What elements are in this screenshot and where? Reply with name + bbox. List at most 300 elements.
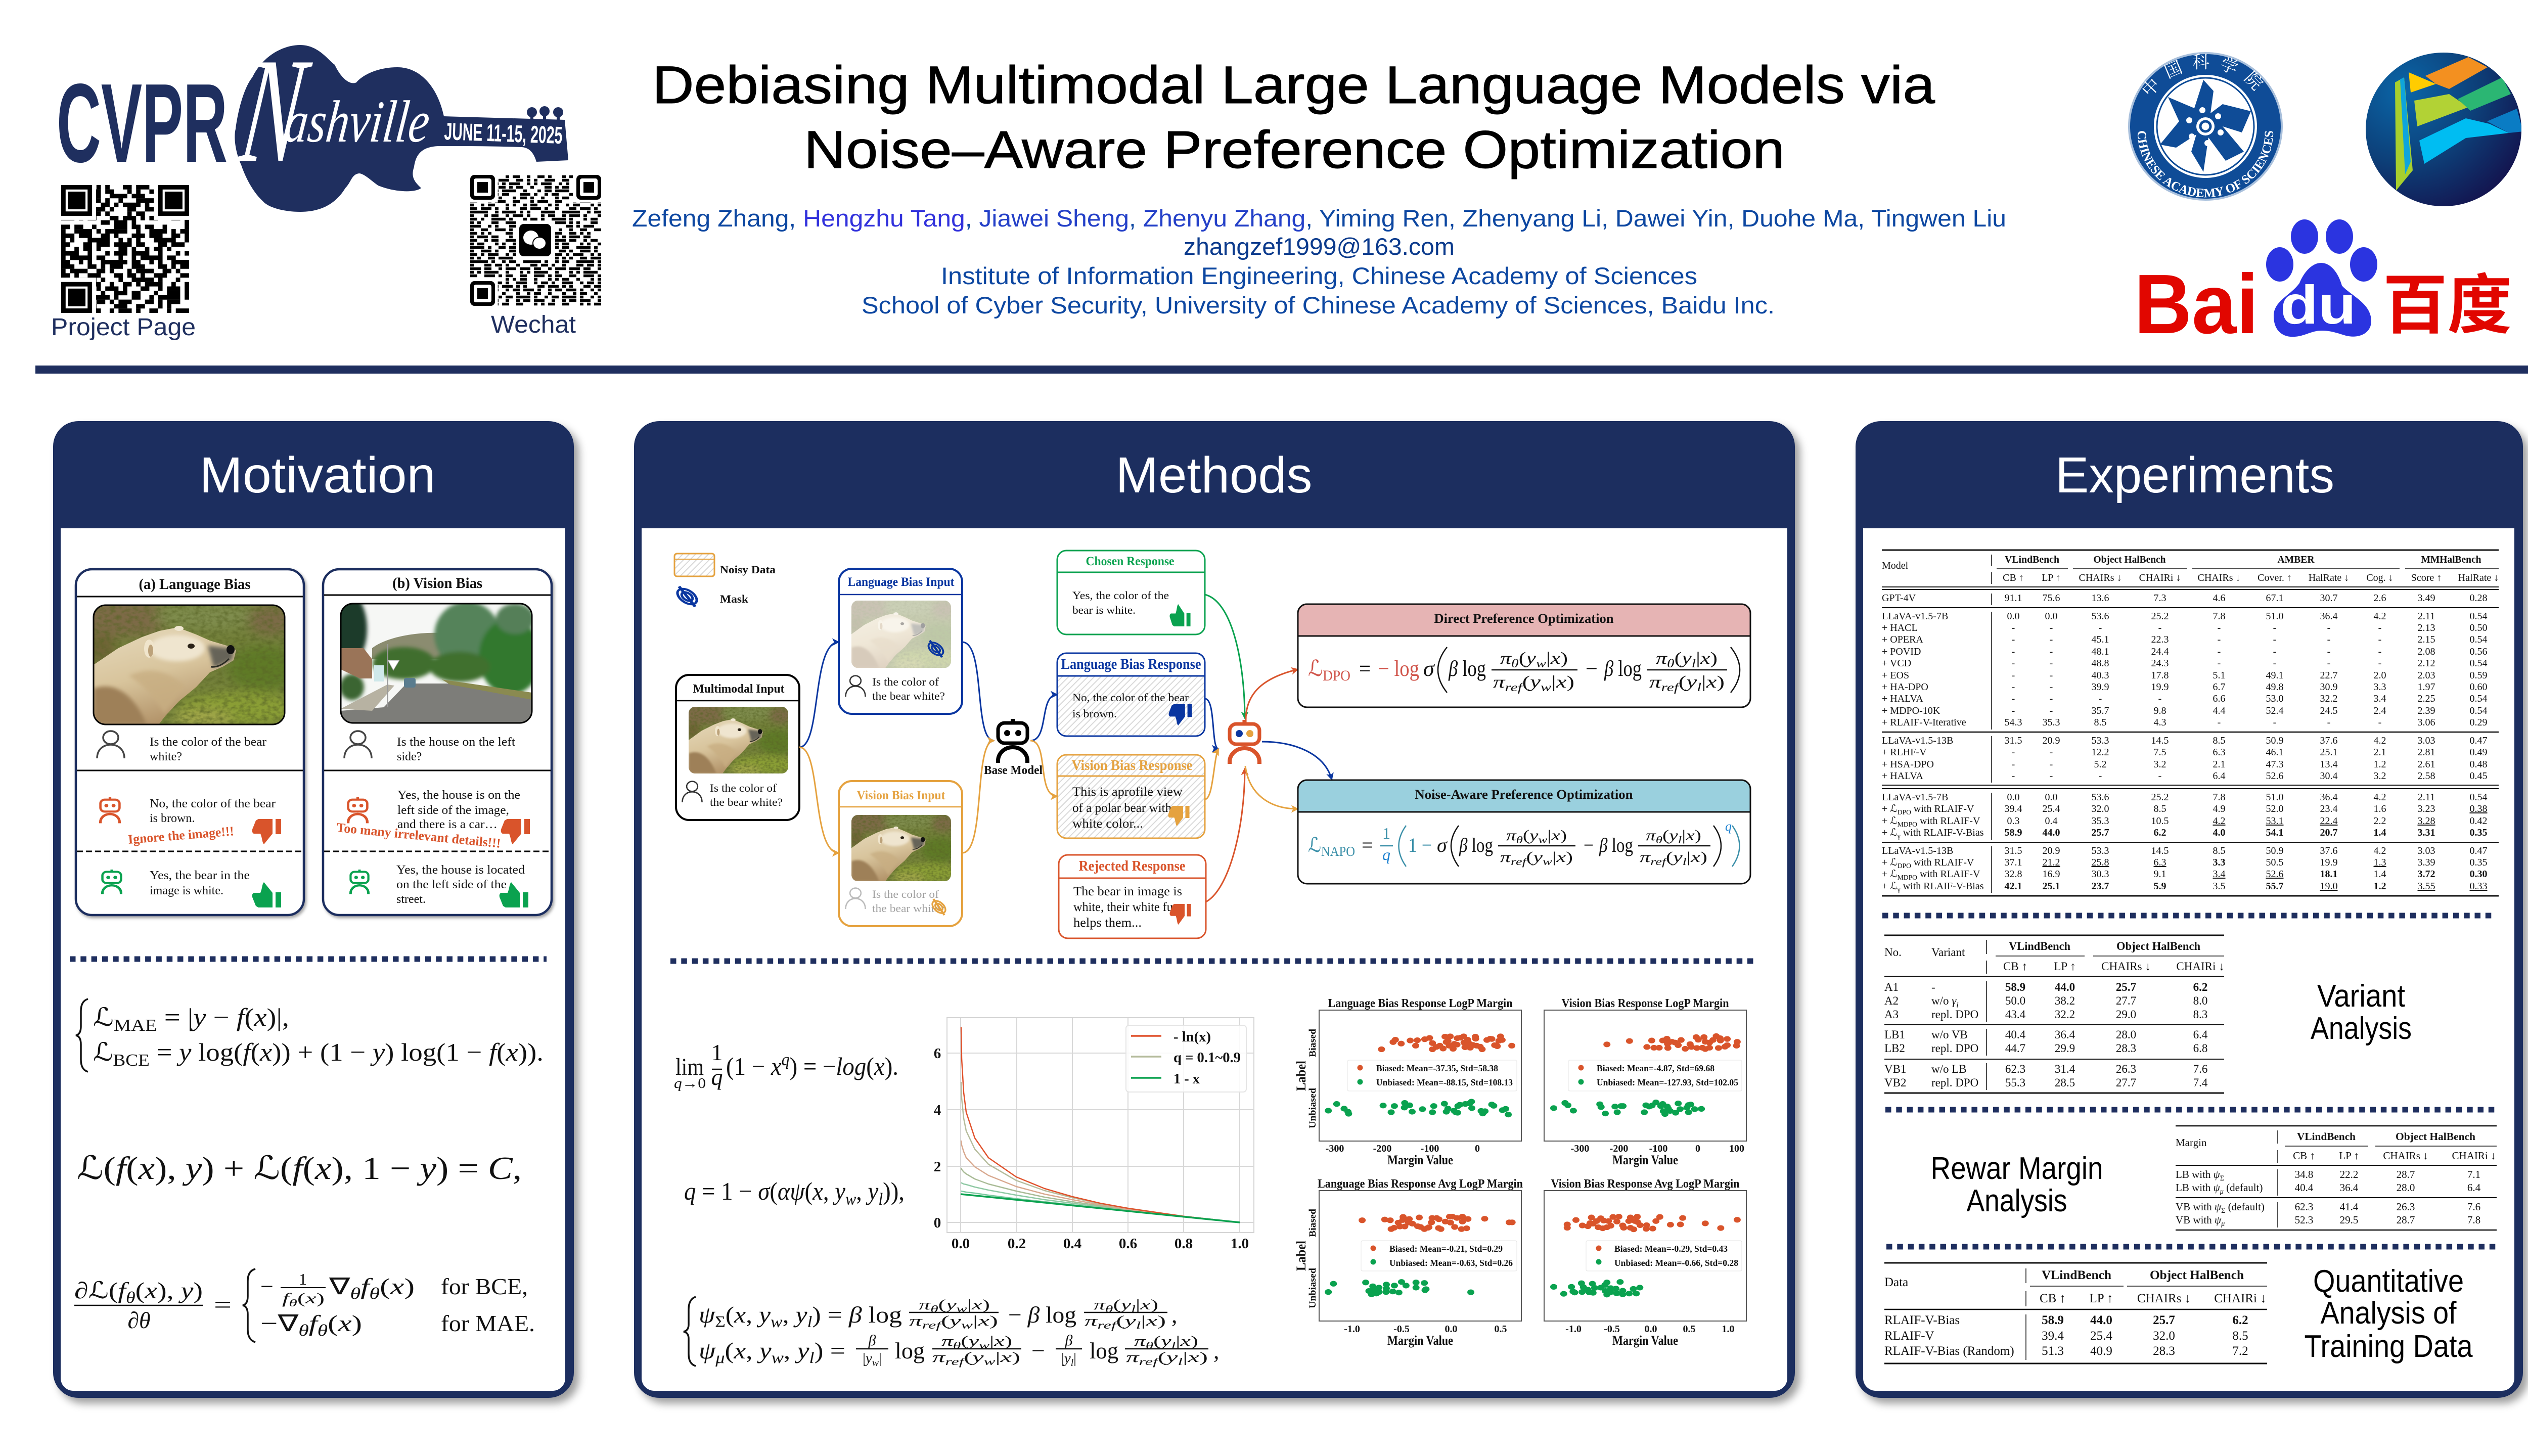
axis ticks: 0.2 <box>1008 1236 1026 1252</box>
table: training data analysis: 6.2 <box>2232 1313 2248 1327</box>
CVPR wordmark: CVPR <box>57 61 228 186</box>
table: main results: + ℒDPO with RLAIF-V <box>1882 857 1974 870</box>
box: vision bias response <box>1057 755 1205 838</box>
table: main results: LLaVA-v1.5-13B <box>1882 735 1953 746</box>
table: main results: 54.1 <box>2266 827 2283 838</box>
table: variant analysis: 6.8 <box>2193 1042 2207 1055</box>
table: main results: 5.9 <box>2154 881 2166 892</box>
table: main results: 8.5 <box>2213 735 2226 746</box>
table: main results: 55.7 <box>2266 881 2283 892</box>
table: main results: 2.13 <box>2418 622 2435 633</box>
table: variant analysis: CHAIRi ↓ <box>2176 960 2225 973</box>
table: main results: 0.45 <box>2469 770 2488 782</box>
table: variant analysis: w/o VB <box>1931 1028 1968 1041</box>
table: main results: 2.12 <box>2418 658 2435 669</box>
table: main results: - <box>2273 717 2276 728</box>
logo: Baidu: du <box>2280 274 2356 335</box>
box: vision bias response: white color... <box>1072 817 1143 831</box>
table: variant analysis: LP ↑ <box>2054 960 2076 973</box>
table: main results: AMBER <box>2277 554 2315 565</box>
table: main results: - <box>2012 622 2015 633</box>
table: main results: 7.8 <box>2213 792 2226 803</box>
table: main results: - <box>2050 770 2053 782</box>
box: rejected response <box>1059 855 1206 938</box>
tick labels and axis titles: Biased <box>1307 1209 1318 1237</box>
table: training data analysis: 8.5 <box>2232 1329 2248 1343</box>
table: main results: 47.3 <box>2266 759 2283 770</box>
table: main results: 1.4 <box>2373 827 2386 838</box>
formula: reward margin: ψμ(x, yw, yl) = <box>699 1338 845 1367</box>
icon: base model: Base Model <box>984 764 1043 777</box>
formula: NAPO loss <box>1308 819 1739 868</box>
chart titles: Language Bias Response Avg LogP Margin <box>1318 1177 1523 1191</box>
logo: CVPR Nashville guitar: ashville <box>282 89 433 155</box>
formula: NAPO loss: 1 <box>1382 824 1390 842</box>
formula: gradient: ∂ℒ( fθ(x), y) <box>74 1278 203 1306</box>
table: variant analysis: w/o LB <box>1931 1063 1967 1075</box>
table: main results: + MDPO-10K <box>1882 705 1940 716</box>
table: main results: - <box>2050 747 2053 758</box>
formula: NAPO loss: σ <box>1437 834 1448 856</box>
table: reward margin analysis: 40.4 <box>2295 1181 2313 1193</box>
table: training data analysis: 7.2 <box>2232 1344 2248 1358</box>
panel: Motivation <box>53 421 574 1398</box>
formula: MAE and BCE losses <box>76 999 544 1072</box>
formula: NAPO loss: q <box>1382 845 1390 863</box>
table: main results: + ℒMDPO with RLAIF-V <box>1882 869 1980 881</box>
table: main results: 2.58 <box>2418 770 2435 782</box>
table: variant analysis: repl. DPO <box>1931 1042 1978 1055</box>
formula: limit: 1 <box>711 1039 723 1065</box>
heading: reward margin analysis <box>1930 1151 2103 1218</box>
tick labels and axis titles: Unbiased <box>1307 1088 1318 1128</box>
table: main results: 22.3 <box>2151 634 2169 645</box>
question <box>397 736 515 763</box>
table: main results: 0.54 <box>2469 693 2488 704</box>
table: reward margin analysis <box>2176 1125 2497 1231</box>
table: main results: 49.8 <box>2266 681 2283 693</box>
table: main results: - <box>2050 646 2053 657</box>
table: reward margin analysis: 29.5 <box>2340 1213 2358 1225</box>
table: main results: - <box>2050 658 2053 669</box>
table: training data analysis: Object HalBench <box>2150 1268 2244 1282</box>
table: variant analysis: A1 <box>1884 981 1899 993</box>
authors and affiliations <box>632 205 2006 318</box>
biased answer: Yes, the house is on the <box>397 789 520 802</box>
tick labels and axis titles: -300 <box>1571 1143 1589 1154</box>
table: reward margin analysis: 28.7 <box>2397 1213 2415 1225</box>
table: variant analysis: 7.6 <box>2193 1063 2207 1075</box>
heading: Motivation <box>199 447 436 504</box>
box: language bias input: Is the color of <box>872 675 939 688</box>
table: main results: 2.4 <box>2373 705 2386 716</box>
table: main results: 35.3 <box>2043 717 2060 728</box>
box: vision bias response: This is aprofile view <box>1072 785 1183 799</box>
table: main results: 30.7 <box>2320 593 2338 604</box>
axis ticks: 0 <box>934 1215 941 1231</box>
box: multimodal input: Multimodal Input <box>693 682 785 696</box>
chart legends: Biased: Mean=-0.21, Std=0.29 <box>1389 1244 1503 1254</box>
table: main results: 0.54 <box>2469 658 2488 669</box>
icon: user <box>97 731 124 758</box>
table: training data analysis: 58.9 <box>2042 1313 2064 1327</box>
table: main results: 0.29 <box>2469 717 2488 728</box>
table: main results: 2.61 <box>2418 759 2435 770</box>
tick labels and axis titles: Unbiased <box>1307 1268 1318 1308</box>
question: white? <box>150 750 182 763</box>
table: variant analysis: 29.9 <box>2055 1042 2075 1055</box>
table: main results: 45.1 <box>2091 634 2109 645</box>
table: main results <box>1882 549 2499 897</box>
table: training data analysis: CHAIRi ↓ <box>2214 1292 2267 1305</box>
formula: DPO loss: β log <box>1604 656 1642 681</box>
table: main results: 53.3 <box>2091 735 2109 746</box>
formula: DPO loss: − log <box>1378 656 1419 681</box>
table: main results: 3.03 <box>2418 735 2435 746</box>
table: variant analysis: 7.4 <box>2193 1076 2207 1089</box>
table: main results: 4.2 <box>2373 792 2386 803</box>
table: variant analysis: 32.2 <box>2055 1008 2075 1021</box>
tick labels and axis titles: -1.0 <box>1344 1324 1360 1335</box>
heading: variant analysis: Variant <box>2317 979 2405 1014</box>
card: language bias <box>76 569 304 915</box>
QR code: Wechat <box>470 174 602 338</box>
table: main results: 4.2 <box>2373 845 2386 856</box>
table: main results: 25.2 <box>2151 611 2169 622</box>
table: main results: 3.23 <box>2418 803 2435 814</box>
table: variant analysis <box>1884 934 2225 1094</box>
icon: unbiased bot <box>350 870 369 894</box>
table: variant analysis: 31.4 <box>2055 1063 2075 1075</box>
table: main results: 6.4 <box>2213 770 2226 782</box>
table: main results: 67.1 <box>2266 593 2283 604</box>
tick labels and axis titles: Label <box>1294 1061 1308 1091</box>
tick labels and axis titles: 0.5 <box>1495 1324 1507 1335</box>
question <box>150 736 266 763</box>
table: variant analysis: CHAIRs ↓ <box>2101 960 2151 973</box>
arrows: data flow <box>799 595 1332 902</box>
tick labels and axis titles: 100 <box>1729 1143 1744 1154</box>
table: main results: 50.5 <box>2266 857 2283 868</box>
table: main results: - <box>2012 693 2015 704</box>
table: main results: 39.9 <box>2091 681 2109 693</box>
logo: Baidu <box>2134 219 2512 351</box>
table: main results: 2.15 <box>2418 634 2435 645</box>
panel: Experiments <box>1856 421 2523 1398</box>
table: variant analysis: repl. DPO <box>1931 1008 1978 1021</box>
axis ticks: 0.4 <box>1063 1236 1081 1252</box>
formula: NAPO loss: β log <box>1459 834 1493 856</box>
table: variant analysis: 28.5 <box>2055 1076 2075 1089</box>
table: reward margin analysis: 28.7 <box>2397 1168 2415 1180</box>
chart titles <box>1318 997 1739 1191</box>
box: language bias input <box>839 569 962 714</box>
date: JUNE 11-15, 2025 <box>444 118 563 149</box>
box: vision bias input: Is the color of <box>872 888 939 900</box>
table: variant analysis: 43.4 <box>2005 1008 2025 1021</box>
table: main results: - <box>2099 622 2102 633</box>
box: rejected response: white, their white fur <box>1073 900 1178 914</box>
formula: reward margin: ψΣ(x, yw, yl) = β log <box>699 1302 902 1331</box>
box: vision bias input <box>839 781 962 926</box>
table: main results: 25.1 <box>2043 881 2060 892</box>
table: main results: 53.6 <box>2091 611 2109 622</box>
table: main results: 51.0 <box>2266 611 2283 622</box>
table: main results: 50.9 <box>2266 845 2283 856</box>
wechat icon <box>519 224 551 256</box>
table: main results: 3.5 <box>2213 881 2226 892</box>
formula: NAPO loss: πθ(yw|x) <box>1506 827 1567 846</box>
table: training data analysis: CB ↑ <box>2040 1292 2066 1305</box>
table: main results: 0.30 <box>2469 869 2488 880</box>
table: main results: - <box>2273 634 2276 645</box>
table: main results: 0.0 <box>2007 611 2019 622</box>
table: main results: 52.6 <box>2266 770 2283 782</box>
table: main results: 46.1 <box>2266 747 2283 758</box>
chart titles: Language Bias Response LogP Margin <box>1328 997 1513 1010</box>
question: Is the color of the bear <box>150 736 266 749</box>
icon: base model <box>984 719 1043 777</box>
tick labels and axis titles: -100 <box>1421 1143 1439 1154</box>
table: main results: 48.1 <box>2091 646 2109 657</box>
formula: DPO loss: ℒDPO <box>1308 656 1350 684</box>
table: main results: 6.3 <box>2154 857 2166 868</box>
table: main results: 6.6 <box>2213 693 2226 704</box>
axis ticks: 6 <box>934 1045 941 1062</box>
formula: gradient: = <box>214 1292 232 1317</box>
heading: variant analysis <box>2311 979 2412 1046</box>
title <box>652 56 1935 179</box>
formula: reward margin: π ref ( y l|x ) <box>1085 1313 1166 1331</box>
table: training data analysis: RLAIF-V-Bias (Random) <box>1884 1344 2014 1358</box>
heading: quantitative analysis: Training Data <box>2305 1329 2473 1364</box>
table: main results: - <box>2218 634 2221 645</box>
legend: Mask <box>720 593 749 605</box>
table: reward margin analysis: VLindBench <box>2297 1130 2356 1143</box>
table: main results: 24.3 <box>2151 658 2169 669</box>
table: main results: Cover. ↑ <box>2258 572 2292 583</box>
table: main results: - <box>2012 658 2015 669</box>
curves <box>961 1027 1240 1222</box>
biased answer <box>397 789 520 831</box>
heading: quantitative analysis: Quantitative <box>2313 1264 2464 1299</box>
scatter points <box>1328 1036 1737 1295</box>
table: main results: 14.5 <box>2151 845 2169 856</box>
scatter charts: margin distributions <box>1294 997 1746 1348</box>
table: main results: - <box>2273 646 2276 657</box>
table: main results: 23.4 <box>2320 803 2338 814</box>
table: main results: 0.38 <box>2469 803 2488 814</box>
table: variant analysis: LB2 <box>1884 1042 1905 1055</box>
table: variant analysis: A3 <box>1884 1008 1899 1021</box>
legend: - ln(x) <box>1173 1029 1211 1045</box>
table: main results: 19.9 <box>2320 857 2338 868</box>
Nashville script: N <box>231 27 318 194</box>
table: main results: 3.2 <box>2154 759 2166 770</box>
table: main results: 0.54 <box>2469 611 2488 622</box>
table: reward margin analysis: CHAIRs ↓ <box>2383 1150 2428 1162</box>
table: variant analysis: 55.3 <box>2005 1076 2025 1089</box>
table: main results: 1.4 <box>2373 869 2386 880</box>
table: main results: + ℒγ with RLAIF-V-Bias <box>1882 827 1984 840</box>
table: training data analysis: RLAIF-V <box>1884 1329 1934 1343</box>
table: reward margin analysis: 52.3 <box>2295 1213 2313 1225</box>
table: variant analysis: 44.0 <box>2055 981 2075 993</box>
table: main results: 19.9 <box>2151 681 2169 693</box>
box: chosen response: Yes, the color of the <box>1072 589 1169 602</box>
unbiased answer <box>396 863 525 906</box>
table: main results: 18.1 <box>2320 869 2338 880</box>
formula: reward margin: π θ(y w |x ) <box>919 1297 990 1315</box>
table: main results: - <box>2012 759 2015 770</box>
table: main results: + ℒDPO with RLAIF-V <box>1882 803 1974 816</box>
table: main results: 0.33 <box>2469 881 2488 892</box>
table: reward margin analysis: 28.0 <box>2397 1181 2415 1193</box>
table: main results: 25.4 <box>2043 803 2060 814</box>
table: main results: - <box>2273 622 2276 633</box>
table: main results: 52.0 <box>2266 803 2283 814</box>
table: main results: 19.0 <box>2320 881 2338 892</box>
icon: thumbs down <box>252 819 281 844</box>
tick labels and axis titles: -100 <box>1649 1143 1667 1154</box>
formula: gradient: − <box>260 1273 274 1299</box>
formula: reward margin: log <box>1090 1338 1118 1363</box>
table: main results: Cog. ↓ <box>2366 572 2394 583</box>
table: main results: - <box>2050 634 2053 645</box>
table: reward margin analysis: CB ↑ <box>2293 1150 2315 1162</box>
callout: Ignore the image!!! <box>127 824 235 847</box>
table: main results: - <box>2327 658 2330 669</box>
chart legends <box>1347 1060 1742 1271</box>
formula: gradient: ∂θ <box>127 1307 151 1333</box>
table: training data analysis: CHAIRs ↓ <box>2137 1292 2191 1305</box>
table: main results: CHAIRs ↓ <box>2079 572 2122 583</box>
box: language bias response: No, the color of the bear <box>1072 691 1189 704</box>
table: main results: - <box>2378 658 2381 669</box>
table: training data analysis: 28.3 <box>2153 1344 2175 1358</box>
formula: reward margin: |yw| <box>863 1350 882 1369</box>
tick labels and axis titles: Margin Value <box>1612 1333 1678 1348</box>
tick labels and axis titles: -200 <box>1610 1143 1628 1154</box>
unbiased answer: street. <box>396 893 426 906</box>
tick labels and axis titles: 1.0 <box>1722 1324 1734 1335</box>
table: main results: - <box>2050 705 2053 716</box>
table: main results: 32.2 <box>2320 693 2338 704</box>
table: main results: + VCD <box>1882 658 1911 669</box>
table: main results: 0.28 <box>2469 593 2488 604</box>
table: main results: 37.1 <box>2004 857 2022 868</box>
table: main results: 20.7 <box>2320 827 2338 838</box>
table: main results: 35.3 <box>2091 815 2109 827</box>
table: main results: LLaVA-v1.5-13B <box>1882 845 1953 856</box>
callout: Too many irrelevant details!!! <box>336 820 502 851</box>
chart legends: Biased: Mean=-37.35, Std=58.38 <box>1376 1063 1498 1073</box>
table: main results: - <box>2012 747 2015 758</box>
table: variant analysis: VLindBench <box>2009 940 2070 952</box>
table: main results: - <box>2012 681 2015 693</box>
icon: user <box>344 731 372 758</box>
formula: limit <box>674 1039 898 1091</box>
table: main results: 0.3 <box>2007 815 2019 827</box>
table: training data analysis: RLAIF-V-Bias <box>1884 1313 1960 1327</box>
formula: gradient: ∇ θfθ(x) <box>329 1273 415 1302</box>
box: multimodal input <box>676 675 799 820</box>
table: main results: + POVID <box>1882 646 1921 657</box>
box: chosen response <box>1057 551 1205 634</box>
photo: street <box>340 603 533 724</box>
table: main results: 1.6 <box>2373 803 2386 814</box>
table: main results: 75.6 <box>2043 593 2060 604</box>
formula: limit: lim <box>675 1054 704 1080</box>
table: variant analysis: 27.7 <box>2116 1076 2136 1089</box>
formula: reward margin: β <box>1065 1332 1073 1349</box>
formula: reward margin: π θ(y l|x ) <box>1134 1333 1198 1351</box>
table: main results: 3.4 <box>2373 693 2386 704</box>
table: variant analysis: - <box>1931 981 1935 993</box>
table: main results: 48.8 <box>2091 658 2109 669</box>
table: main results: 0.60 <box>2469 681 2488 693</box>
table: reward margin analysis: 34.8 <box>2295 1168 2313 1180</box>
table: main results: + HSA-DPO <box>1882 759 1934 770</box>
table: reward margin analysis: 6.4 <box>2467 1181 2480 1193</box>
axis ticks: 0.0 <box>952 1236 970 1252</box>
card: vision bias: (b) Vision Bias <box>392 575 482 592</box>
formula: DPO loss: = <box>1359 656 1371 681</box>
paw <box>2266 219 2377 337</box>
formula: reward margin: |yl| <box>1061 1350 1076 1369</box>
table: main results: 32.8 <box>2004 869 2022 880</box>
formula: gradient <box>74 1269 535 1342</box>
table: main results: 3.31 <box>2418 827 2435 838</box>
box: multimodal input: the bear white? <box>710 796 783 808</box>
box: language bias response: is brown. <box>1072 707 1117 720</box>
table: main results: 35.7 <box>2091 705 2109 716</box>
table: main results: - <box>2050 622 2053 633</box>
tick labels and axis titles: 0 <box>1695 1143 1700 1154</box>
logo: flag emblem <box>2366 53 2523 206</box>
table: variant analysis: VB1 <box>1884 1063 1906 1075</box>
table: main results: 44.0 <box>2043 827 2060 838</box>
table: main results: HalRate ↓ <box>2309 572 2349 583</box>
table: variant analysis: 25.7 <box>2116 981 2136 993</box>
formula: NAPO loss: 1 − <box>1408 834 1432 856</box>
table: main results: 9.8 <box>2154 705 2166 716</box>
table: training data analysis: 25.4 <box>2090 1329 2112 1343</box>
table: main results: 2.11 <box>2418 611 2435 622</box>
table: main results: MMHalBench <box>2421 554 2481 565</box>
table: reward margin analysis: 7.8 <box>2467 1213 2480 1225</box>
table: main results: - <box>2099 693 2102 704</box>
table: training data analysis <box>1884 1262 2267 1364</box>
table: main results: - <box>2050 670 2053 681</box>
table: main results: - <box>2327 646 2330 657</box>
table: variant analysis: w/o γi <box>1931 994 1959 1010</box>
table: reward margin analysis: 26.3 <box>2397 1201 2415 1213</box>
table: main results: 13.4 <box>2320 759 2338 770</box>
formula: NAPO loss: πθ(yl|x) <box>1646 827 1701 846</box>
photo: polar bear <box>76 599 301 729</box>
table: reward margin analysis: 36.4 <box>2340 1181 2358 1193</box>
box: multimodal input: Is the color of <box>710 782 777 794</box>
table: main results: 4.6 <box>2213 593 2226 604</box>
table: variant analysis: VB2 <box>1884 1076 1906 1089</box>
table: main results: 36.4 <box>2320 611 2338 622</box>
table: main results: 5.1 <box>2213 670 2226 681</box>
table: variant analysis: 38.2 <box>2055 994 2075 1007</box>
table: main results: 6.7 <box>2213 681 2226 693</box>
formula: NAPO loss: π ref (y l|x) <box>1640 849 1707 868</box>
table: main results: - <box>2327 634 2330 645</box>
